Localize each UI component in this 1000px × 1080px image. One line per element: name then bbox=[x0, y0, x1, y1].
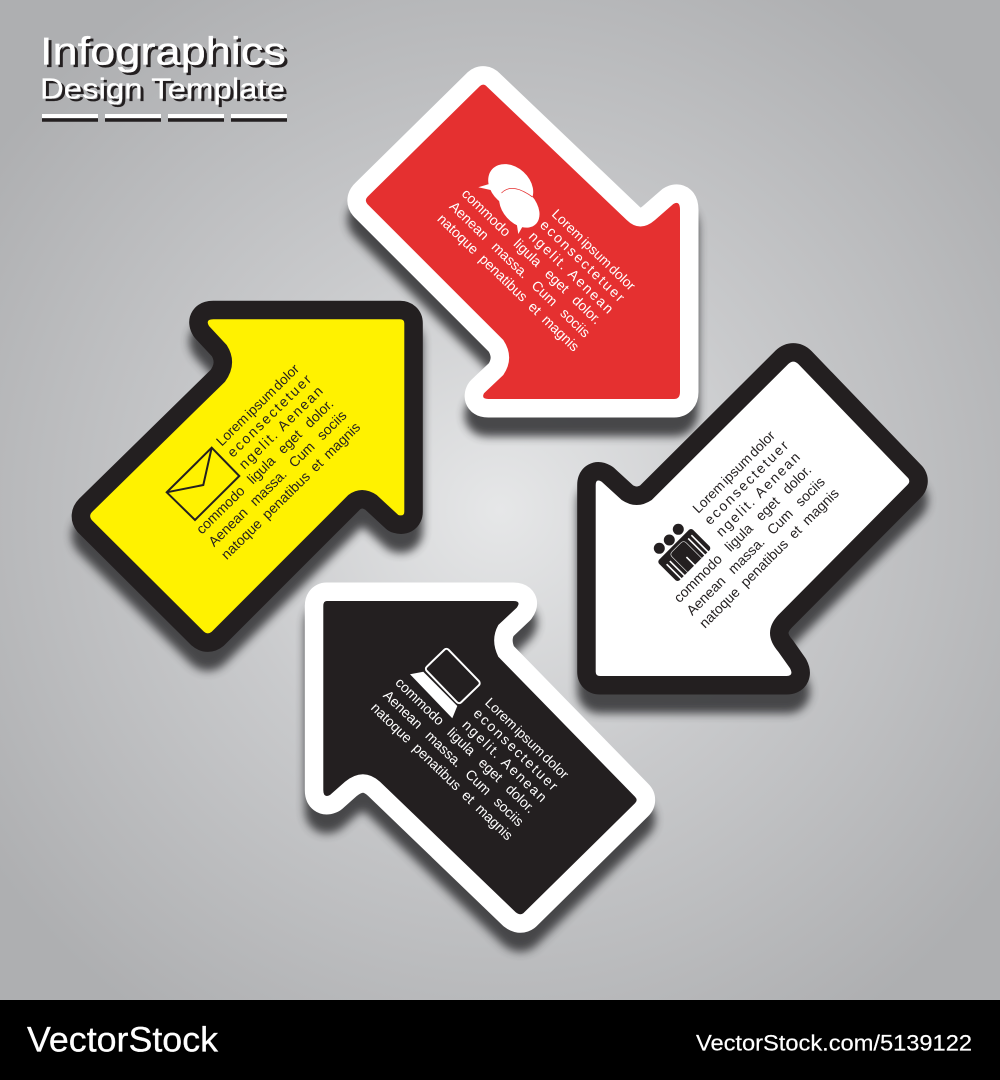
text: red panel: Lorem ipsum dolor bbox=[549, 206, 639, 294]
text: white panel: econsectetuer bbox=[701, 437, 792, 528]
text: yellow panel: Lorem ipsum dolor bbox=[213, 361, 302, 449]
text: black panel: natoque penatibus et magnis bbox=[368, 699, 516, 843]
text: red panel: ngelit. Aenean bbox=[526, 228, 617, 317]
text: black panel: Lorem ipsum dolor bbox=[482, 695, 572, 782]
text: yellow panel: econsectetuer bbox=[224, 371, 314, 460]
title: Design Template bbox=[40, 74, 285, 106]
text: black panel: Aenean massa. Cum sociis bbox=[380, 687, 527, 829]
text: red panel: commodo ligula eget dolor. bbox=[459, 185, 605, 327]
text: red panel bbox=[434, 151, 640, 354]
arrow shadows bbox=[90, 104, 909, 933]
arrow: black bbox=[323, 601, 637, 914]
text: white panel: natoque penatibus et magnis bbox=[696, 485, 842, 631]
text: black panel: econsectetuer bbox=[470, 705, 562, 794]
title: Design Template bbox=[43, 76, 288, 108]
text: yellow panel bbox=[159, 359, 363, 562]
icon: speech bubbles bbox=[478, 155, 548, 236]
text: yellow panel: commodo ligula eget dolor. bbox=[193, 395, 337, 537]
arrow: red bbox=[366, 85, 680, 399]
title: Infographics bbox=[43, 33, 289, 76]
arrow: yellow bbox=[90, 319, 404, 633]
text: white panel bbox=[636, 425, 842, 631]
text: black panel: commodo ligula eget dolor. bbox=[392, 674, 539, 816]
text: black panel: ngelit. Aenean bbox=[459, 716, 550, 805]
footer url: VectorStock.com/5139122 bbox=[696, 1030, 972, 1056]
text: yellow panel: ngelit. Aenean bbox=[235, 383, 326, 472]
text: black panel bbox=[368, 640, 573, 843]
text: red panel: econsectetuer bbox=[537, 216, 628, 305]
arrow: white bbox=[596, 362, 909, 676]
text: yellow panel: Aenean massa. Cum sociis bbox=[205, 407, 350, 550]
footer bar bbox=[0, 1000, 1000, 1080]
text: red panel: natoque penatibus et magnis bbox=[434, 210, 583, 354]
title bbox=[40, 30, 289, 120]
footer logo: VectorStock bbox=[27, 1020, 219, 1060]
title: Infographics bbox=[40, 30, 286, 74]
icon: people bbox=[654, 524, 712, 583]
text: white panel: ngelit. Aenean bbox=[712, 449, 803, 539]
icon: laptop bbox=[410, 648, 481, 718]
text: white panel: Lorem ipsum dolor bbox=[690, 428, 778, 516]
text: white panel: Aenean massa. Cum sociis bbox=[683, 473, 828, 618]
icon: envelope bbox=[167, 448, 239, 520]
text: yellow panel: natoque penatibus et magnis bbox=[218, 419, 363, 562]
text: white panel: commodo ligula eget dolor. bbox=[670, 462, 814, 606]
text: red panel: Aenean massa. Cum sociis bbox=[447, 198, 594, 341]
